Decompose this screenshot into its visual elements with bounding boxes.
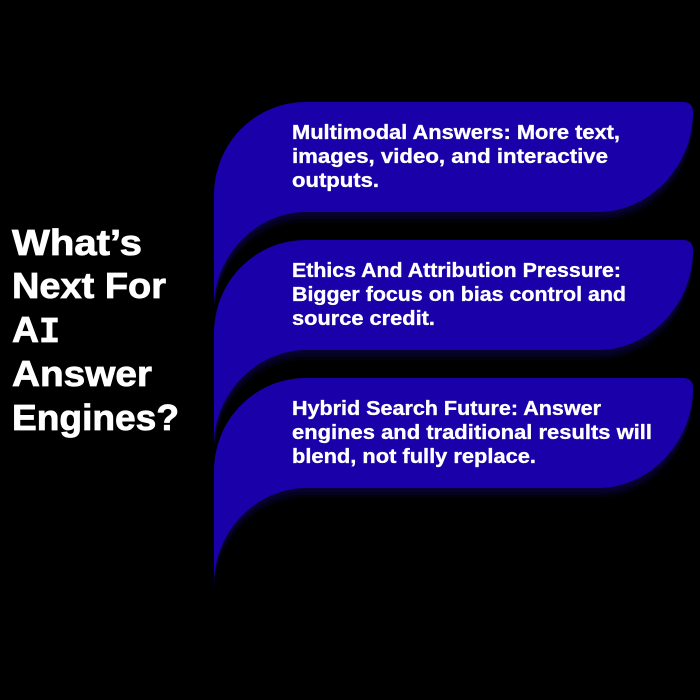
text: ethics and attribution pressure bbox=[292, 259, 626, 330]
text: multimodal answers: images, video, and interactive bbox=[292, 145, 608, 168]
text: multimodal answers: Multimodal Answers: More text, bbox=[292, 121, 620, 144]
title: Engines? bbox=[12, 397, 179, 438]
text: hybrid search future: Hybrid Search Future: Answer bbox=[292, 397, 601, 420]
text: ethics and attribution pressure: source credit. bbox=[292, 307, 435, 330]
title: What’s bbox=[12, 222, 142, 263]
text: hybrid search future: blend, not fully replace. bbox=[292, 445, 536, 468]
title bbox=[12, 222, 179, 438]
text: multimodal answers: outputs. bbox=[292, 169, 379, 192]
text: ethics and attribution pressure: Ethics And Attribution Pressure: bbox=[292, 259, 621, 282]
panel: hybrid search future bbox=[214, 378, 693, 594]
title: I bbox=[39, 312, 60, 353]
text: multimodal answers bbox=[292, 121, 620, 192]
panel: ethics and attribution pressure bbox=[214, 240, 693, 456]
text: hybrid search future bbox=[292, 397, 652, 468]
title: Answer bbox=[12, 353, 152, 394]
title: Next For bbox=[12, 265, 166, 306]
text: hybrid search future: engines and traditional results will bbox=[292, 421, 652, 444]
text: ethics and attribution pressure: Bigger focus on bias control and bbox=[292, 283, 626, 306]
panel: multimodal answers bbox=[214, 102, 693, 318]
title: A bbox=[12, 309, 39, 350]
